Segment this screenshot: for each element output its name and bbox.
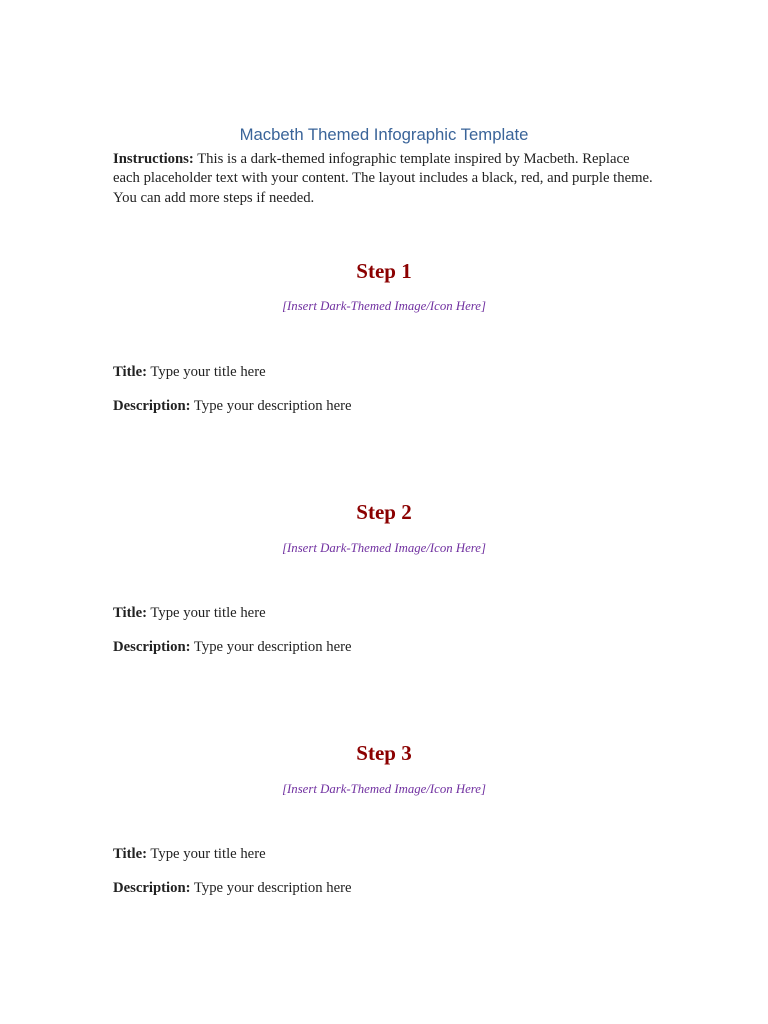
- step 2 image placeholder: [Insert Dark-Themed Image/Icon Here]: [282, 541, 486, 555]
- step 2 title: Title: Type your title here: [113, 605, 266, 621]
- step 1 description: Description: Type your description here: [113, 398, 352, 414]
- step 3 image placeholder: [Insert Dark-Themed Image/Icon Here]: [282, 782, 486, 796]
- step 3 title: Title: Type your title here: [113, 846, 266, 862]
- instructions text: You can add more steps if needed.: [113, 190, 314, 206]
- step 1 image placeholder: [Insert Dark-Themed Image/Icon Here]: [282, 299, 486, 313]
- title: Macbeth Themed Infographic Template: [240, 125, 528, 144]
- step 2 description: Description: Type your description here: [113, 639, 352, 655]
- instructions text: each placeholder text with your content. The layout includes a black, red, and purple theme.: [113, 170, 653, 186]
- step 3 heading: Step 3: [356, 741, 412, 765]
- instructions text: [113, 151, 653, 206]
- step 2 heading: Step 2: [356, 500, 412, 524]
- step 3 description: Description: Type your description here: [113, 880, 352, 896]
- step 1 title: Title: Type your title here: [113, 364, 266, 380]
- step 1 heading: Step 1: [356, 259, 412, 283]
- instructions text: Instructions: This is a dark-themed infographic template inspired by Macbeth. Replace: [113, 151, 630, 167]
